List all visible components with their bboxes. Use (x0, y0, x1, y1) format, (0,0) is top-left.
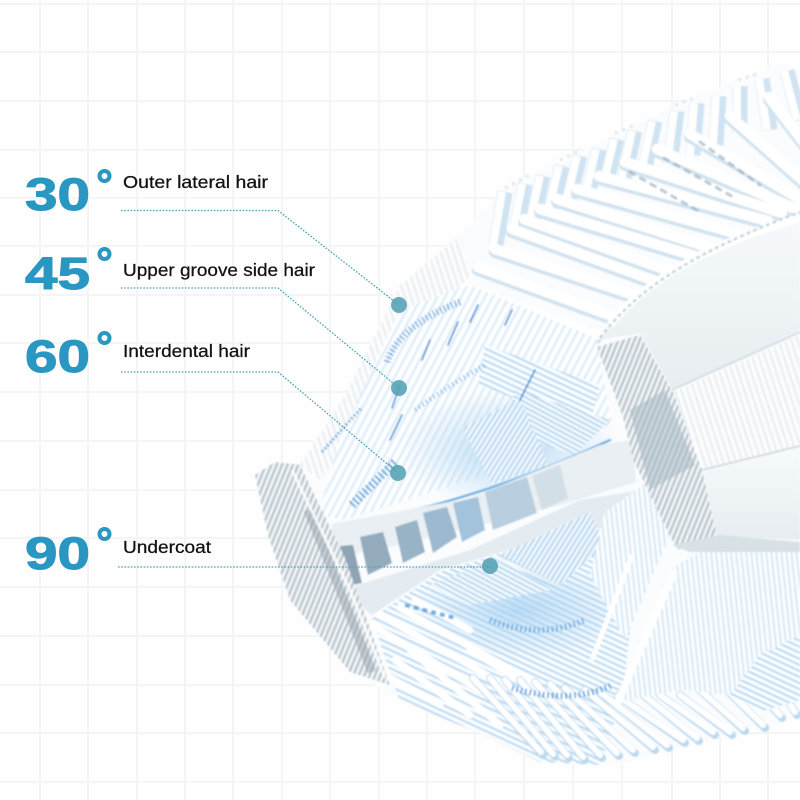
lower rail (342, 490, 655, 615)
label: Outer lateral hair (123, 172, 268, 192)
leader line (118, 566, 490, 568)
angle value 60: 60 (25, 331, 90, 382)
marker dot (482, 558, 498, 574)
blue bristle streaks (322, 302, 610, 525)
head band bottom (703, 448, 800, 540)
marker dot (391, 297, 407, 313)
callout: 60 degrees interdental hair (25, 331, 406, 481)
upper long bristles (462, 97, 800, 338)
nested bristle tiles lower (500, 512, 605, 585)
deep blue shading lower (410, 560, 630, 660)
callout: 90 degrees undercoat (25, 528, 498, 579)
central rail (332, 440, 636, 558)
inner upper face (318, 285, 612, 520)
label: Upper groove side hair (123, 260, 315, 280)
white long lower bristles (372, 600, 540, 725)
nested bristle tiles upper (478, 345, 600, 425)
leader line (121, 372, 398, 473)
outer left face of bristles (300, 235, 470, 480)
angle value 45: 45 (25, 248, 90, 299)
lower right bristle block (618, 545, 800, 702)
callout: 45 degrees upper groove side hair (25, 248, 407, 396)
degree sign (100, 171, 110, 181)
toothbrush head illustration (255, 62, 800, 765)
left end cap (255, 462, 390, 685)
deep blue shading upper (400, 390, 620, 510)
leader line (121, 288, 399, 388)
degree sign (100, 249, 110, 259)
label: Interdental hair (123, 341, 250, 361)
marker dot (391, 380, 407, 396)
degree sign (100, 333, 110, 343)
head band top (600, 212, 800, 390)
marker dot (390, 465, 406, 481)
degree sign (100, 529, 110, 539)
leader line (121, 210, 399, 305)
head band middle (673, 335, 800, 470)
angle value 30: 30 (25, 169, 90, 220)
brush silhouette (255, 62, 800, 765)
label: Undercoat (123, 537, 211, 557)
blue lower bristle arcs (512, 685, 612, 696)
callout: 30 degrees outer lateral hair (25, 169, 407, 313)
upper outer bristle row (493, 71, 800, 245)
crystal junction (597, 335, 717, 550)
lower inner bristles (372, 535, 640, 765)
angle value 90: 90 (25, 528, 90, 579)
lower bristle tips (473, 678, 797, 760)
gray teeth blocks (340, 465, 568, 585)
